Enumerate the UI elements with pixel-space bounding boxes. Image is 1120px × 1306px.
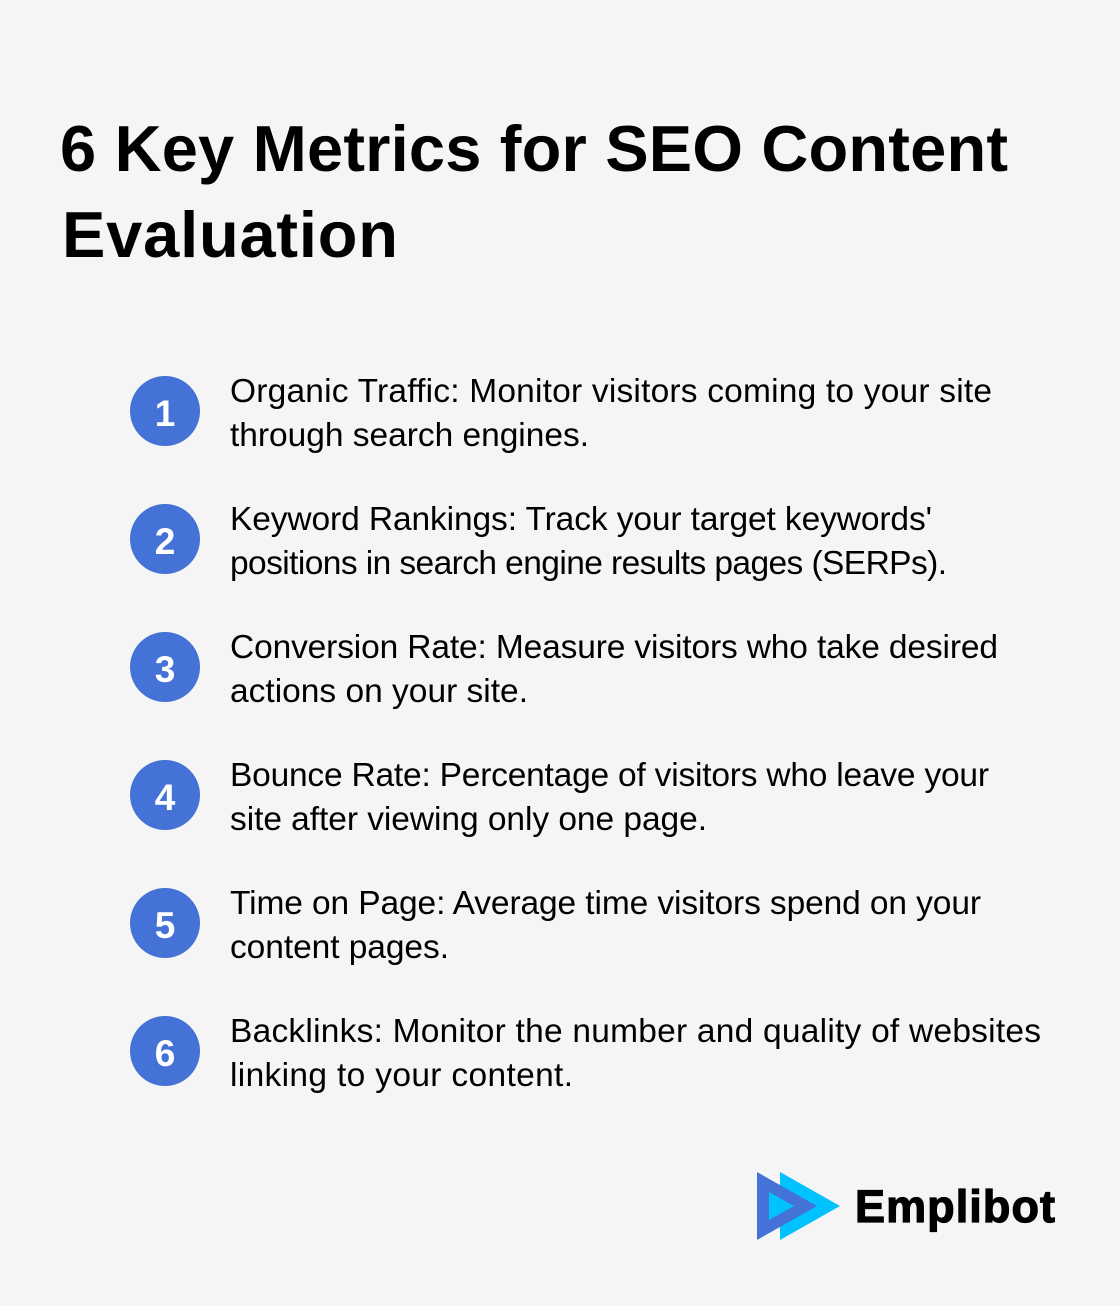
text: conversion rate: actions on your site.: [230, 673, 528, 710]
number badge 4: 4: [155, 777, 176, 818]
text: conversion rate: Conversion Rate: Measure visitors who take desired: [230, 629, 998, 666]
number badge 6: [130, 1016, 200, 1086]
number badge 1: [130, 376, 200, 446]
text: time on page: [230, 885, 981, 966]
text: time on page: content pages.: [230, 929, 449, 966]
text: backlinks: [230, 1013, 1041, 1094]
number badge 6: 6: [155, 1033, 175, 1074]
title: 6 Key Metrics for SEO Content: [60, 112, 1008, 185]
list item 1: organic traffic: [130, 373, 992, 454]
text: bounce rate: [230, 757, 989, 838]
list item 3: conversion rate: [130, 629, 998, 710]
number badge 2: [130, 504, 200, 574]
list item 2: keyword rankings: [130, 501, 947, 582]
list item 5: time on page: [130, 885, 981, 966]
text: backlinks: Backlinks: Monitor the number and quality of websites: [230, 1013, 1041, 1050]
number badge 5: [130, 888, 200, 958]
icon: play triangles: [757, 1172, 840, 1240]
text: organic traffic: Organic Traffic: Monitor visitors coming to your site: [230, 373, 992, 410]
text: organic traffic: through search engines.: [230, 417, 589, 454]
list item 6: backlinks: [130, 1013, 1041, 1094]
logo wordmark: Emplibot: [855, 1181, 1055, 1232]
number badge 3: [130, 632, 200, 702]
text: keyword rankings: positions in search engine results pages (SERPs).: [230, 545, 947, 582]
number badge 3: 3: [155, 649, 175, 690]
title: Evaluation: [62, 198, 398, 271]
number badge 2: 2: [155, 521, 175, 562]
title: [60, 112, 1008, 271]
text: backlinks: linking to your content.: [230, 1057, 573, 1094]
list item 4: bounce rate: [130, 757, 989, 838]
number badge 1: 1: [155, 393, 175, 434]
text: bounce rate: Bounce Rate: Percentage of visitors who leave your: [230, 757, 989, 794]
text: organic traffic: [230, 373, 992, 454]
text: keyword rankings: [230, 501, 947, 582]
text: conversion rate: [230, 629, 998, 710]
text: bounce rate: site after viewing only one page.: [230, 801, 707, 838]
number badge 5: 5: [155, 905, 175, 946]
logo: Emplibot: [757, 1172, 1055, 1240]
text: keyword rankings: Keyword Rankings: Track your target keywords': [230, 501, 932, 538]
text: time on page: Time on Page: Average time visitors spend on your: [230, 885, 981, 922]
number badge 4: [130, 760, 200, 830]
